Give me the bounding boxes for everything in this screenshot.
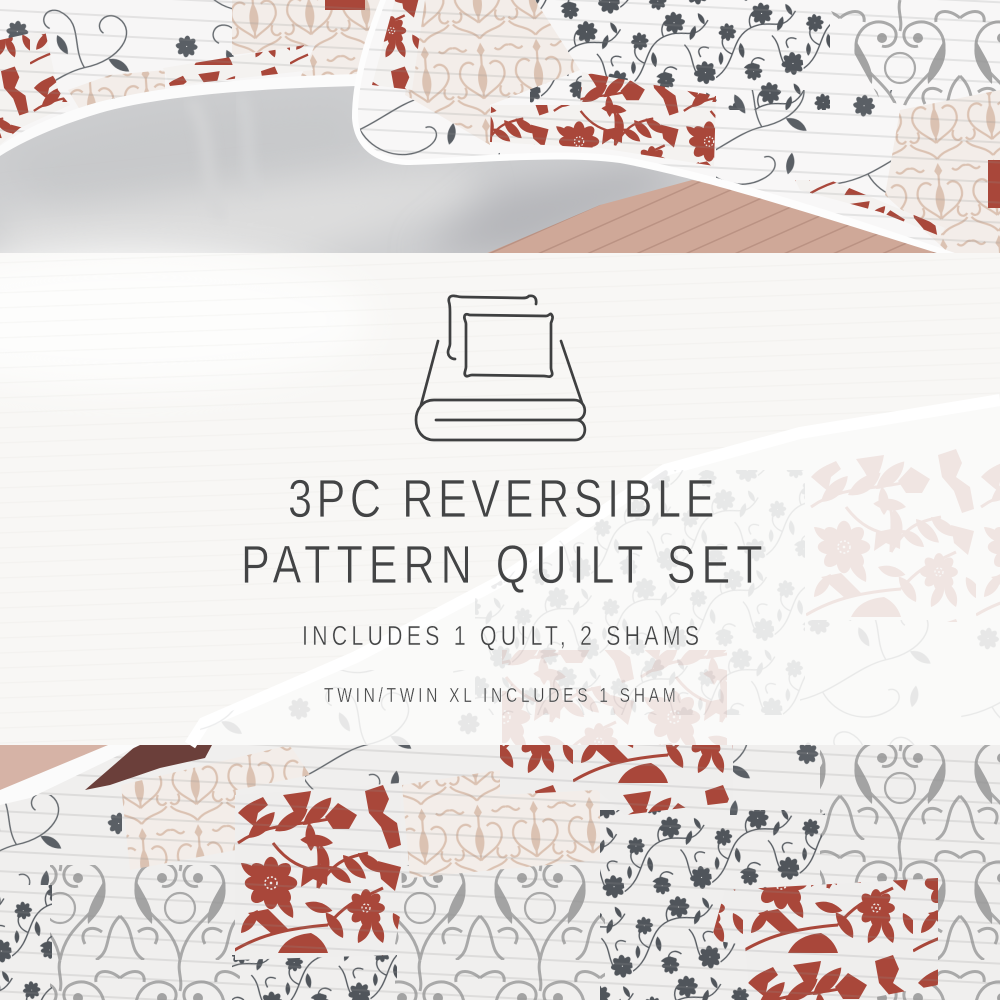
right pillow bbox=[352, 0, 1000, 253]
subtitle: INCLUDES 1 QUILT, 2 SHAMS bbox=[302, 622, 699, 652]
central banner bbox=[0, 250, 1000, 745]
salmon reverse quilt bbox=[485, 180, 945, 254]
title bbox=[241, 470, 763, 595]
title: 3PC REVERSIBLE bbox=[288, 470, 714, 529]
left pillow bbox=[0, 0, 400, 160]
note: TWIN/TWIN XL INCLUDES 1 SHAM bbox=[324, 684, 676, 706]
quilt right edge bbox=[561, 341, 582, 403]
stitched quilting lines bbox=[0, 745, 1000, 1000]
title: PATTERN QUILT SET bbox=[241, 536, 763, 595]
bottom quilt photo bbox=[0, 745, 1000, 1000]
grey sheet bbox=[0, 60, 1000, 260]
front pillow bbox=[464, 314, 553, 377]
folded quilt corner bbox=[0, 745, 212, 805]
icon: folded quilt with two pillows bbox=[416, 296, 585, 440]
back pillow bbox=[448, 296, 536, 359]
grey swirl patches bbox=[50, 745, 1000, 1000]
faded reverse quilt layer bbox=[190, 400, 1000, 745]
photo: sheet and pillows bbox=[0, 0, 1000, 260]
beige damask patches bbox=[121, 745, 600, 878]
folded quilt body bbox=[416, 400, 585, 440]
quilt left edge bbox=[421, 341, 438, 405]
red floral patches bbox=[235, 745, 938, 1000]
dark vine patches bbox=[0, 745, 825, 1000]
